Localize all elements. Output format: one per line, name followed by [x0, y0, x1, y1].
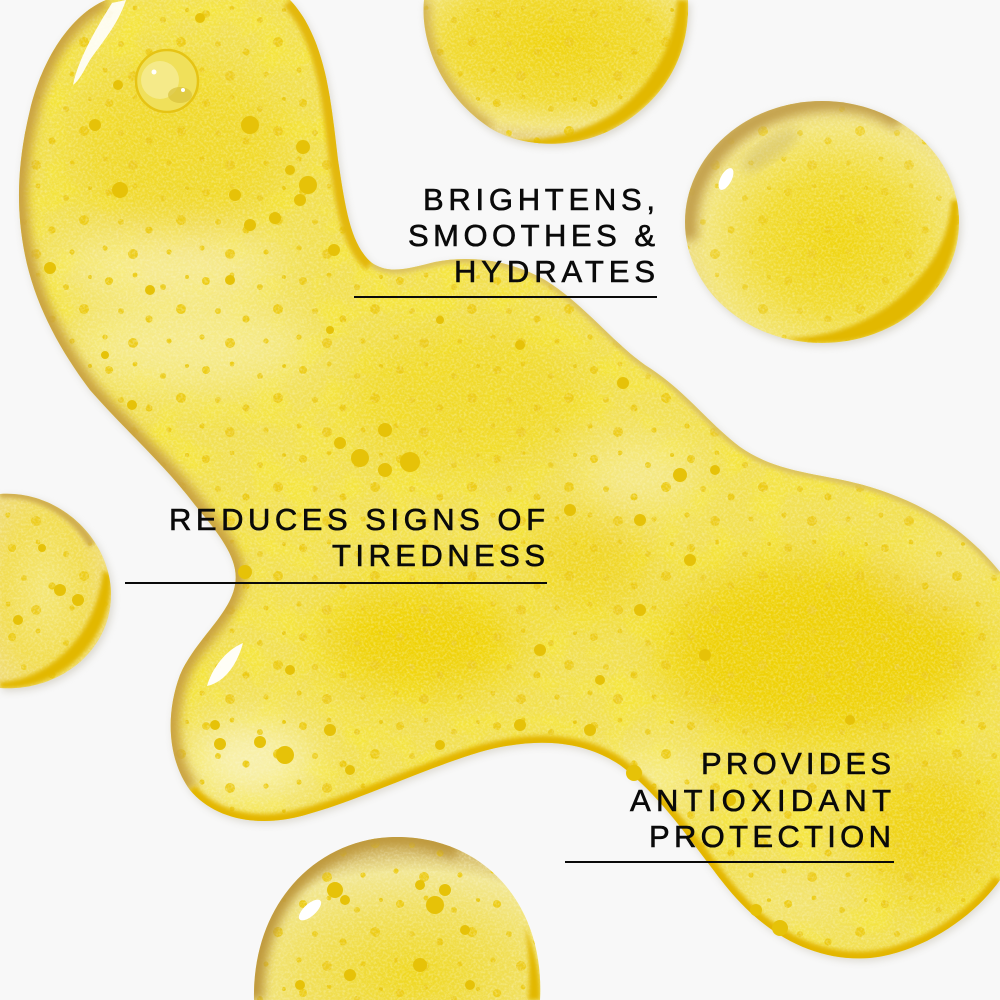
callout: antioxidant: PROVIDES — [701, 746, 891, 781]
highlight: lower lobe — [207, 643, 243, 686]
callout: brightens: HYDRATES — [454, 254, 655, 289]
air bubble — [136, 50, 198, 112]
callout: tiredness: TIREDNESS — [332, 538, 545, 573]
callout: brightens: BRIGHTENS, — [423, 182, 655, 217]
callout: antioxidant: ANTIOXIDANT — [630, 783, 891, 818]
callout: brightens — [354, 182, 657, 298]
blob rim: top edge — [372, 259, 1000, 572]
callout: brightens: SMOOTHES & — [408, 218, 655, 253]
dark gold bubbles — [44, 13, 855, 936]
oil drop: right — [685, 100, 961, 346]
highlight — [296, 896, 324, 924]
oil drop: top — [420, 0, 690, 150]
bubbles — [295, 880, 475, 990]
callout: antioxidant: PROTECTION — [649, 819, 891, 854]
callout: antioxidant — [565, 746, 894, 863]
callout: tiredness: REDUCES SIGNS OF — [169, 502, 545, 537]
blob rim: golden right shoulder — [290, 0, 372, 263]
blob rim: translucent tan edge — [19, 0, 236, 790]
highlight: top left — [73, 0, 126, 85]
highlight — [716, 166, 736, 192]
bubbles — [13, 544, 84, 625]
blob rim: golden lower edge — [190, 743, 1000, 958]
oil drop: bottom — [250, 835, 542, 1000]
callout: tiredness — [125, 502, 547, 584]
oil drop: left — [0, 490, 113, 691]
